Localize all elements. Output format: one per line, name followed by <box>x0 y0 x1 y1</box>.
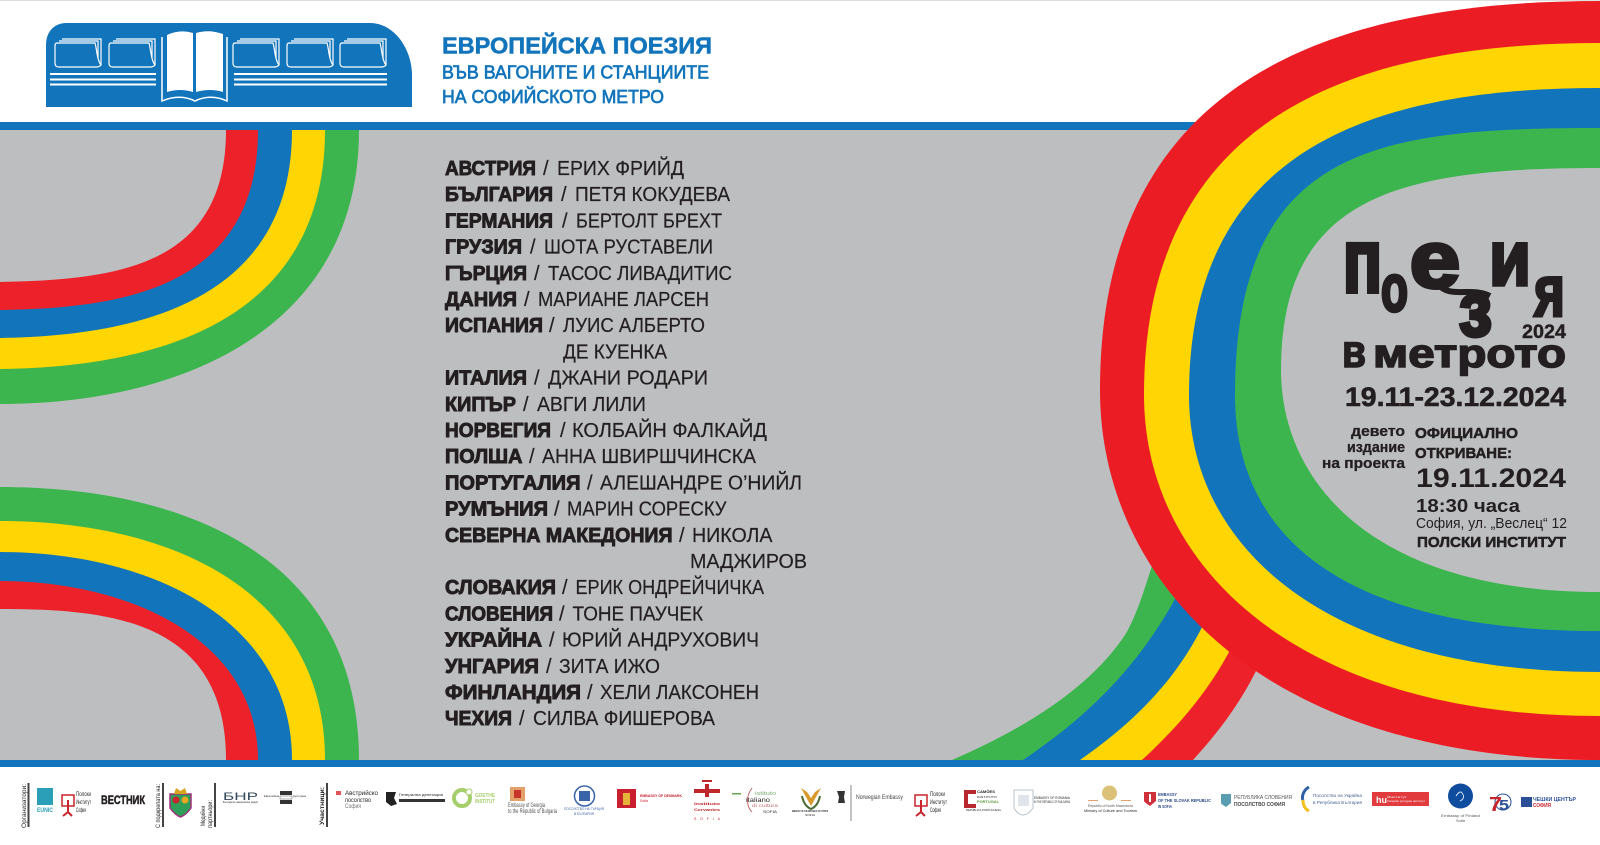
project wordmark: поезия 2024 в метрото: о <box>1381 251 1408 325</box>
footer: media partners <box>200 783 306 828</box>
list of countries and poets: ЮРИЙ АНДРУХОВИЧ <box>562 628 759 652</box>
list of countries and poets: МАРИН СОРЕСКУ <box>567 499 727 521</box>
header title: ЕВРОПЕЙСКА ПОЕЗИЯ <box>442 32 712 58</box>
list of countries and poets: МАРИАНЕ ЛАРСЕН <box>538 289 709 311</box>
logo: Embassy of the Slovak Republic: IN SOFIA <box>1158 804 1173 809</box>
logo: Goethe Institut: INSTITUT <box>475 799 495 805</box>
list of countries and poets: НОРВЕГИЯ <box>445 420 551 442</box>
list of countries and poets: / <box>534 263 540 285</box>
logo: Hungarian Cultural Institute: hu <box>1376 795 1387 805</box>
logo: Polish Institute: София <box>930 807 941 814</box>
list of countries and poets: / <box>587 472 593 494</box>
logo: Embassy of the Slovak Republic: OF THE SLOVAK REPUBLIC <box>1158 798 1212 803</box>
logo: Goethe Institut <box>454 789 496 806</box>
logo: Austrian embassy <box>336 789 378 810</box>
footer: organisers: Полски <box>76 791 91 798</box>
list of countries and poets: АВСТРИЯ <box>445 158 536 180</box>
list of countries and poets: / <box>554 499 560 521</box>
logo: Embassy of Romania: IN THE REPUBLIC OF BULGARIA <box>1034 800 1071 804</box>
logo: Embassy of Ukraine <box>1303 787 1363 811</box>
footer: organisers: EUNIC <box>37 808 54 814</box>
list of countries and poets: НИКОЛА <box>692 525 773 547</box>
footer: media partners: БНР <box>223 791 258 803</box>
official opening details: ОТКРИВАНЕ: <box>1415 445 1512 462</box>
logo: Embassy of Romania <box>1014 790 1071 815</box>
footer: organisers: София <box>76 807 86 814</box>
list of countries and poets: / <box>523 394 529 416</box>
list of countries and poets: ТОНЕ ПАУЧЕК <box>572 603 703 625</box>
project wordmark: поезия 2024 в метрото: 2024 <box>1522 321 1566 343</box>
logo: Istituto italiano di cultura: di cultura <box>752 803 779 808</box>
logo: Belgian delegation with lion <box>386 792 445 806</box>
logo: Instituto Cervantes: Instituto <box>694 801 721 806</box>
footer: organisers: Организатори: <box>22 784 28 828</box>
logo: Embassy of Georgia: Embassy of Georgia <box>508 803 545 809</box>
footer: organisers: ВЕСТНИК <box>101 793 146 807</box>
logo: Austrian embassy: Австрийско <box>345 789 378 797</box>
list of countries and poets: / <box>549 630 555 652</box>
rainbow: big ring on the right <box>1100 1 1600 760</box>
official opening details: ПОЛСКИ ИНСТИТУТ <box>1417 534 1566 551</box>
logo: Czech Centre 75 years: 5 <box>1499 797 1509 814</box>
list of countries and poets: / <box>519 708 525 730</box>
list of countries and poets: / <box>559 603 565 625</box>
logo: Camões institute of Portugal: PORTUGAL <box>977 800 1000 804</box>
logo: Instituto Cervantes: Cervantes <box>694 807 721 812</box>
list of countries and poets <box>445 156 807 730</box>
logo: Polish Institute <box>915 791 947 816</box>
logo: Polish Institute: Полски <box>930 791 945 798</box>
logo: Embassy of Denmark: Sofia <box>640 799 648 803</box>
list of countries and poets: ЕРИК ОНДРЕЙЧИЧКА <box>576 575 765 599</box>
project wordmark: поезия 2024 в метрото: я <box>1533 252 1565 332</box>
logo: Embassy of Slovenia <box>1221 794 1292 808</box>
list of countries and poets: КИПЪР <box>445 394 516 416</box>
footer: participants: Участници: <box>320 787 326 825</box>
logo: Czech Centre 75 years: 7 <box>1489 794 1502 816</box>
footer: organisers <box>22 783 146 828</box>
list of countries and poets: СЛОВЕНИЯ <box>445 603 553 625</box>
list of countries and poets: / <box>543 158 549 180</box>
logo: Embassy of Ukraine: в Република България <box>1313 800 1363 805</box>
logo: Austrian embassy: посолство <box>345 797 371 804</box>
logo: Embassy of Greece <box>564 786 604 816</box>
logo: Embassy of Denmark: EMBASSY OF DENMARK <box>640 793 682 798</box>
logo: Norwegian Embassy <box>837 785 903 821</box>
project wordmark: поезия 2024 в метрото: в <box>1342 325 1366 377</box>
list of countries and poets: МАДЖИРОВ <box>690 551 807 573</box>
list of countries and poets: ЕРИХ ФРИЙД <box>557 156 684 180</box>
header title <box>442 32 712 107</box>
logo: Embassy of Cyprus: SOFIA <box>805 813 815 817</box>
footer: media partners: Медийни <box>200 806 207 826</box>
logo: Hungarian Cultural Institute <box>1372 792 1429 806</box>
logo: Istituto italiano di cultura <box>732 788 779 814</box>
header logo: metro train with books <box>46 23 412 107</box>
logo: Istituto italiano di cultura: SOFIA <box>763 809 777 814</box>
official opening details: ОФИЦИАЛНО <box>1415 425 1518 442</box>
logo: Polish Institute: Институт <box>930 799 947 806</box>
logo: Embassy of Ukraine: Посолство на Украйна <box>1313 792 1363 798</box>
list of countries and poets: ГЪРЦИЯ <box>445 263 527 285</box>
logo: Goethe Institut: GOETHE <box>475 793 496 799</box>
logo: Embassy of Slovenia: РЕПУБЛИКА СЛОВЕНИЯ <box>1234 795 1292 801</box>
list of countries and poets: / <box>679 525 685 547</box>
logo: Austrian embassy: София <box>345 803 361 810</box>
note: ninth edition of the project <box>1322 424 1406 472</box>
logo: Embassy of the Slovak Republic: EMBASSY <box>1158 792 1177 797</box>
list of countries and poets: / <box>524 289 530 311</box>
list of countries and poets: БЪЛГАРИЯ <box>445 184 553 206</box>
list of countries and poets: ФИНЛАНДИЯ <box>445 682 581 704</box>
rainbow: top-left curve <box>0 130 359 404</box>
project wordmark: поезия 2024 в метрото: метрото <box>1373 332 1566 376</box>
list of countries and poets: ШОТА РУСТАВЕЛИ <box>544 237 713 259</box>
logo: Camões institute of Portugal: CAMÕES <box>977 789 996 794</box>
logo: Embassy of Georgia <box>508 787 557 815</box>
logo: Instituto Cervantes: SOFIA <box>694 817 721 821</box>
footer: media partners: Културна <box>293 794 306 798</box>
logo: Belgian delegation with lion: Генерална делегация <box>399 793 443 797</box>
logo: Embassy of Denmark <box>617 789 682 808</box>
official opening details: София, ул. „Веслец“ 12 <box>1416 516 1567 532</box>
list of countries and poets: ГЕРМАНИЯ <box>445 210 553 232</box>
list of countries and poets: ЛУИС АЛБЕРТО <box>563 315 705 337</box>
footer: media partners: Европейска <box>264 794 279 798</box>
list of countries and poets: ДАНИЯ <box>445 289 517 311</box>
list of countries and poets: / <box>546 656 552 678</box>
logo: Czech Centre 75 years: ЧЕШКИ ЦЕНТЪР <box>1533 797 1577 803</box>
list of countries and poets: ПЕТЯ КОКУДЕВА <box>575 184 731 206</box>
list of countries and poets: ДЕ КУЕНКА <box>563 341 668 363</box>
list of countries and poets: БЕРТОЛТ БРЕХТ <box>576 210 722 232</box>
list of countries and poets: ЗИТА ИЖО <box>559 656 660 678</box>
project wordmark: поезия 2024 в метрото: п <box>1343 212 1382 312</box>
list of countries and poets: / <box>561 184 567 206</box>
list of countries and poets: СЕВЕРНА МАКЕДОНИЯ <box>445 525 672 547</box>
official opening details: 19.11.2024 <box>1416 463 1566 493</box>
rainbow: tail of the big ring running to the bottom rail <box>952 510 1400 760</box>
list of countries and poets: ИСПАНИЯ <box>445 315 543 337</box>
list of countries and poets: ХЕЛИ ЛАКСОНЕН <box>600 682 759 704</box>
list of countries and poets: ИТАЛИЯ <box>445 368 527 390</box>
footer: participants <box>320 783 328 827</box>
header title: ВЪВ ВАГОНИТЕ И СТАНЦИИТЕ <box>442 62 709 82</box>
logo: Embassy of Slovenia: ПОСОЛСТВО СОФИЯ <box>1234 802 1285 808</box>
logo: North Macedonia ministry: Republic of North Macedonia <box>1088 804 1133 808</box>
logo: Embassy of Finland: Embassy of Finland <box>1441 813 1480 818</box>
header title: НА СОФИЙСКОТО МЕТРО <box>442 86 664 107</box>
list of countries and poets: АВГИ ЛИЛИ <box>537 394 646 416</box>
note: ninth edition of the project: на проекта <box>1322 456 1406 472</box>
list of countries and poets: УНГАРИЯ <box>445 656 539 678</box>
logo: Norwegian Embassy: Norwegian Embassy <box>856 795 903 801</box>
logo: Hungarian Cultural Institute: Унгарски културен институт <box>1387 799 1426 803</box>
logo: Hungarian Cultural Institute: Институт <box>1387 795 1408 799</box>
list of countries and poets: / <box>529 446 535 468</box>
logo: Camões institute of Portugal: INSTITUTO <box>977 795 998 799</box>
list of countries and poets: / <box>534 368 540 390</box>
logo: Embassy of Romania: EMBASSY OF ROMANIA <box>1034 796 1071 800</box>
list of countries and poets: / <box>562 210 568 232</box>
list of countries and poets: / <box>530 237 536 259</box>
rainbow: bottom-left curve <box>0 487 359 760</box>
note: ninth edition of the project: издание <box>1347 440 1405 456</box>
logo: Istituto italiano di cultura: istituto <box>755 791 776 797</box>
list of countries and poets: АННА ШВИРШЧИНСКА <box>542 446 757 468</box>
footer: organisers: Институт <box>76 799 91 806</box>
official opening details <box>1415 425 1567 551</box>
project wordmark: поезия 2024 в метрото: з <box>1459 268 1492 353</box>
logo: Embassy of Greece: В БЪЛГАРИЯ <box>574 812 594 816</box>
list of countries and poets: ТАСОС ЛИВАДИТИС <box>548 263 732 285</box>
footer: supported by Sofia municipality <box>156 783 191 828</box>
logo: Embassy of Finland: Sofia <box>1456 818 1466 823</box>
logo: Instituto Cervantes <box>694 780 721 821</box>
project wordmark: поезия 2024 в метрото: е <box>1410 215 1460 304</box>
logo: Embassy of Georgia: to the Republic of Bulgaria <box>508 809 557 815</box>
logo: Embassy of Cyprus <box>792 788 828 817</box>
logo: Czech Centre 75 years: СОФИЯ <box>1533 803 1551 809</box>
list of countries and poets: / <box>549 315 555 337</box>
logo: Embassy of Greece: ПОСОЛСТВО НА ГЪРЦИЯ <box>564 807 604 811</box>
project wordmark: поезия 2024 в метрото: и <box>1489 214 1531 302</box>
logo: Embassy of Cyprus: EMBASSY OF THE REPUBLIC OF CYPRUS <box>792 809 828 813</box>
list of countries and poets: ЧЕХИЯ <box>445 708 512 730</box>
list of countries and poets: ДЖАНИ РОДАРИ <box>548 368 708 390</box>
project dates: 19.11-23.12.2024 <box>1345 382 1566 412</box>
list of countries and poets: / <box>560 420 566 442</box>
logo: Czech Centre 75 years <box>1489 794 1577 816</box>
list of countries and poets: АЛЕШАНДРЕ О’НИЙЛ <box>600 470 802 494</box>
logo: Embassy of Finland <box>1441 784 1480 823</box>
note: ninth edition of the project: девето <box>1351 424 1405 440</box>
list of countries and poets: ПОЛША <box>445 446 522 468</box>
list of countries and poets: РУМЪНИЯ <box>445 499 548 521</box>
list of countries and poets: КОЛБАЙН ФАЛКАЙД <box>572 418 767 442</box>
list of countries and poets: УКРАЙНА <box>445 628 542 652</box>
logo: Istituto italiano di cultura: italiano <box>746 798 771 804</box>
footer: supported by Sofia municipality: С подкрепата на: <box>156 784 162 828</box>
list of countries and poets: / <box>587 682 593 704</box>
footer: media partners: Българско национално радио <box>223 801 259 804</box>
list of countries and poets: СИЛВА ФИШЕРОВА <box>533 708 716 730</box>
list of countries and poets: ГРУЗИЯ <box>445 237 522 259</box>
logo: North Macedonia ministry <box>1084 786 1137 813</box>
list of countries and poets: СЛОВАКИЯ <box>445 577 556 599</box>
official opening details: 18:30 часа <box>1416 496 1521 516</box>
list of countries and poets: / <box>562 577 568 599</box>
logo: Camões institute of Portugal: REPÚBLICA PORTUGUESA <box>966 809 1001 812</box>
logo: North Macedonia ministry: Ministry of Culture and Tourism <box>1084 809 1137 813</box>
logo: Camões institute of Portugal <box>964 789 1001 812</box>
footer: media partners: партньори: <box>208 800 214 828</box>
project wordmark: поезия 2024 в метрото <box>1342 212 1566 377</box>
logo: Embassy of the Slovak Republic <box>1144 792 1212 809</box>
list of countries and poets: ПОРТУГАЛИЯ <box>445 472 580 494</box>
